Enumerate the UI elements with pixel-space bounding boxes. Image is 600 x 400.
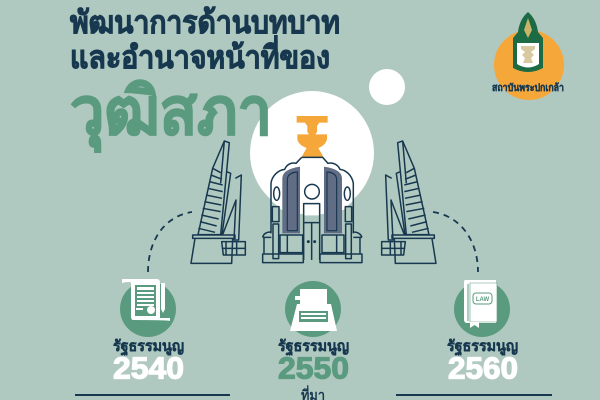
icon: golden constitution bowl bbox=[297, 116, 328, 157]
large white circle behind monument bbox=[250, 91, 374, 215]
icon: law book: LAW bbox=[476, 297, 489, 303]
logo: Institute emblem: สถาบันพระปกเกล้า bbox=[492, 82, 564, 94]
left rule bbox=[75, 394, 230, 396]
item: constitution 2540 bbox=[113, 279, 184, 386]
title: และอำนาจหน้าที่ของ bbox=[70, 35, 330, 75]
item: constitution 2550 bbox=[278, 281, 349, 386]
dashed connector left bbox=[148, 212, 192, 272]
title: วุฒิสภา bbox=[70, 74, 272, 153]
item: constitution 2550: รัฐธรรมนูญ bbox=[278, 338, 349, 356]
item: constitution 2550: 2550 bbox=[278, 350, 349, 386]
right sail sculpture bbox=[382, 141, 436, 263]
left sail sculpture bbox=[191, 141, 245, 263]
monument illustration bbox=[191, 116, 436, 263]
right rule bbox=[396, 394, 552, 396]
item: constitution 2560: รัฐธรรมนูญ bbox=[447, 338, 518, 356]
item: constitution 2560 bbox=[447, 280, 518, 386]
title bbox=[70, 5, 340, 153]
icon: typewriter bbox=[285, 281, 341, 337]
decorative small white circle bbox=[369, 69, 405, 105]
dashed connector right bbox=[433, 212, 478, 272]
title: พัฒนาการด้านบทบาท bbox=[70, 5, 340, 40]
monument body bbox=[263, 157, 362, 263]
item: constitution 2540: 2540 bbox=[113, 350, 184, 386]
item: constitution 2560: 2560 bbox=[448, 350, 518, 386]
item: constitution 2540: รัฐธรรมนูญ bbox=[113, 338, 184, 356]
icon: document and pen bbox=[120, 279, 176, 337]
logo: Institute emblem bbox=[492, 12, 564, 100]
